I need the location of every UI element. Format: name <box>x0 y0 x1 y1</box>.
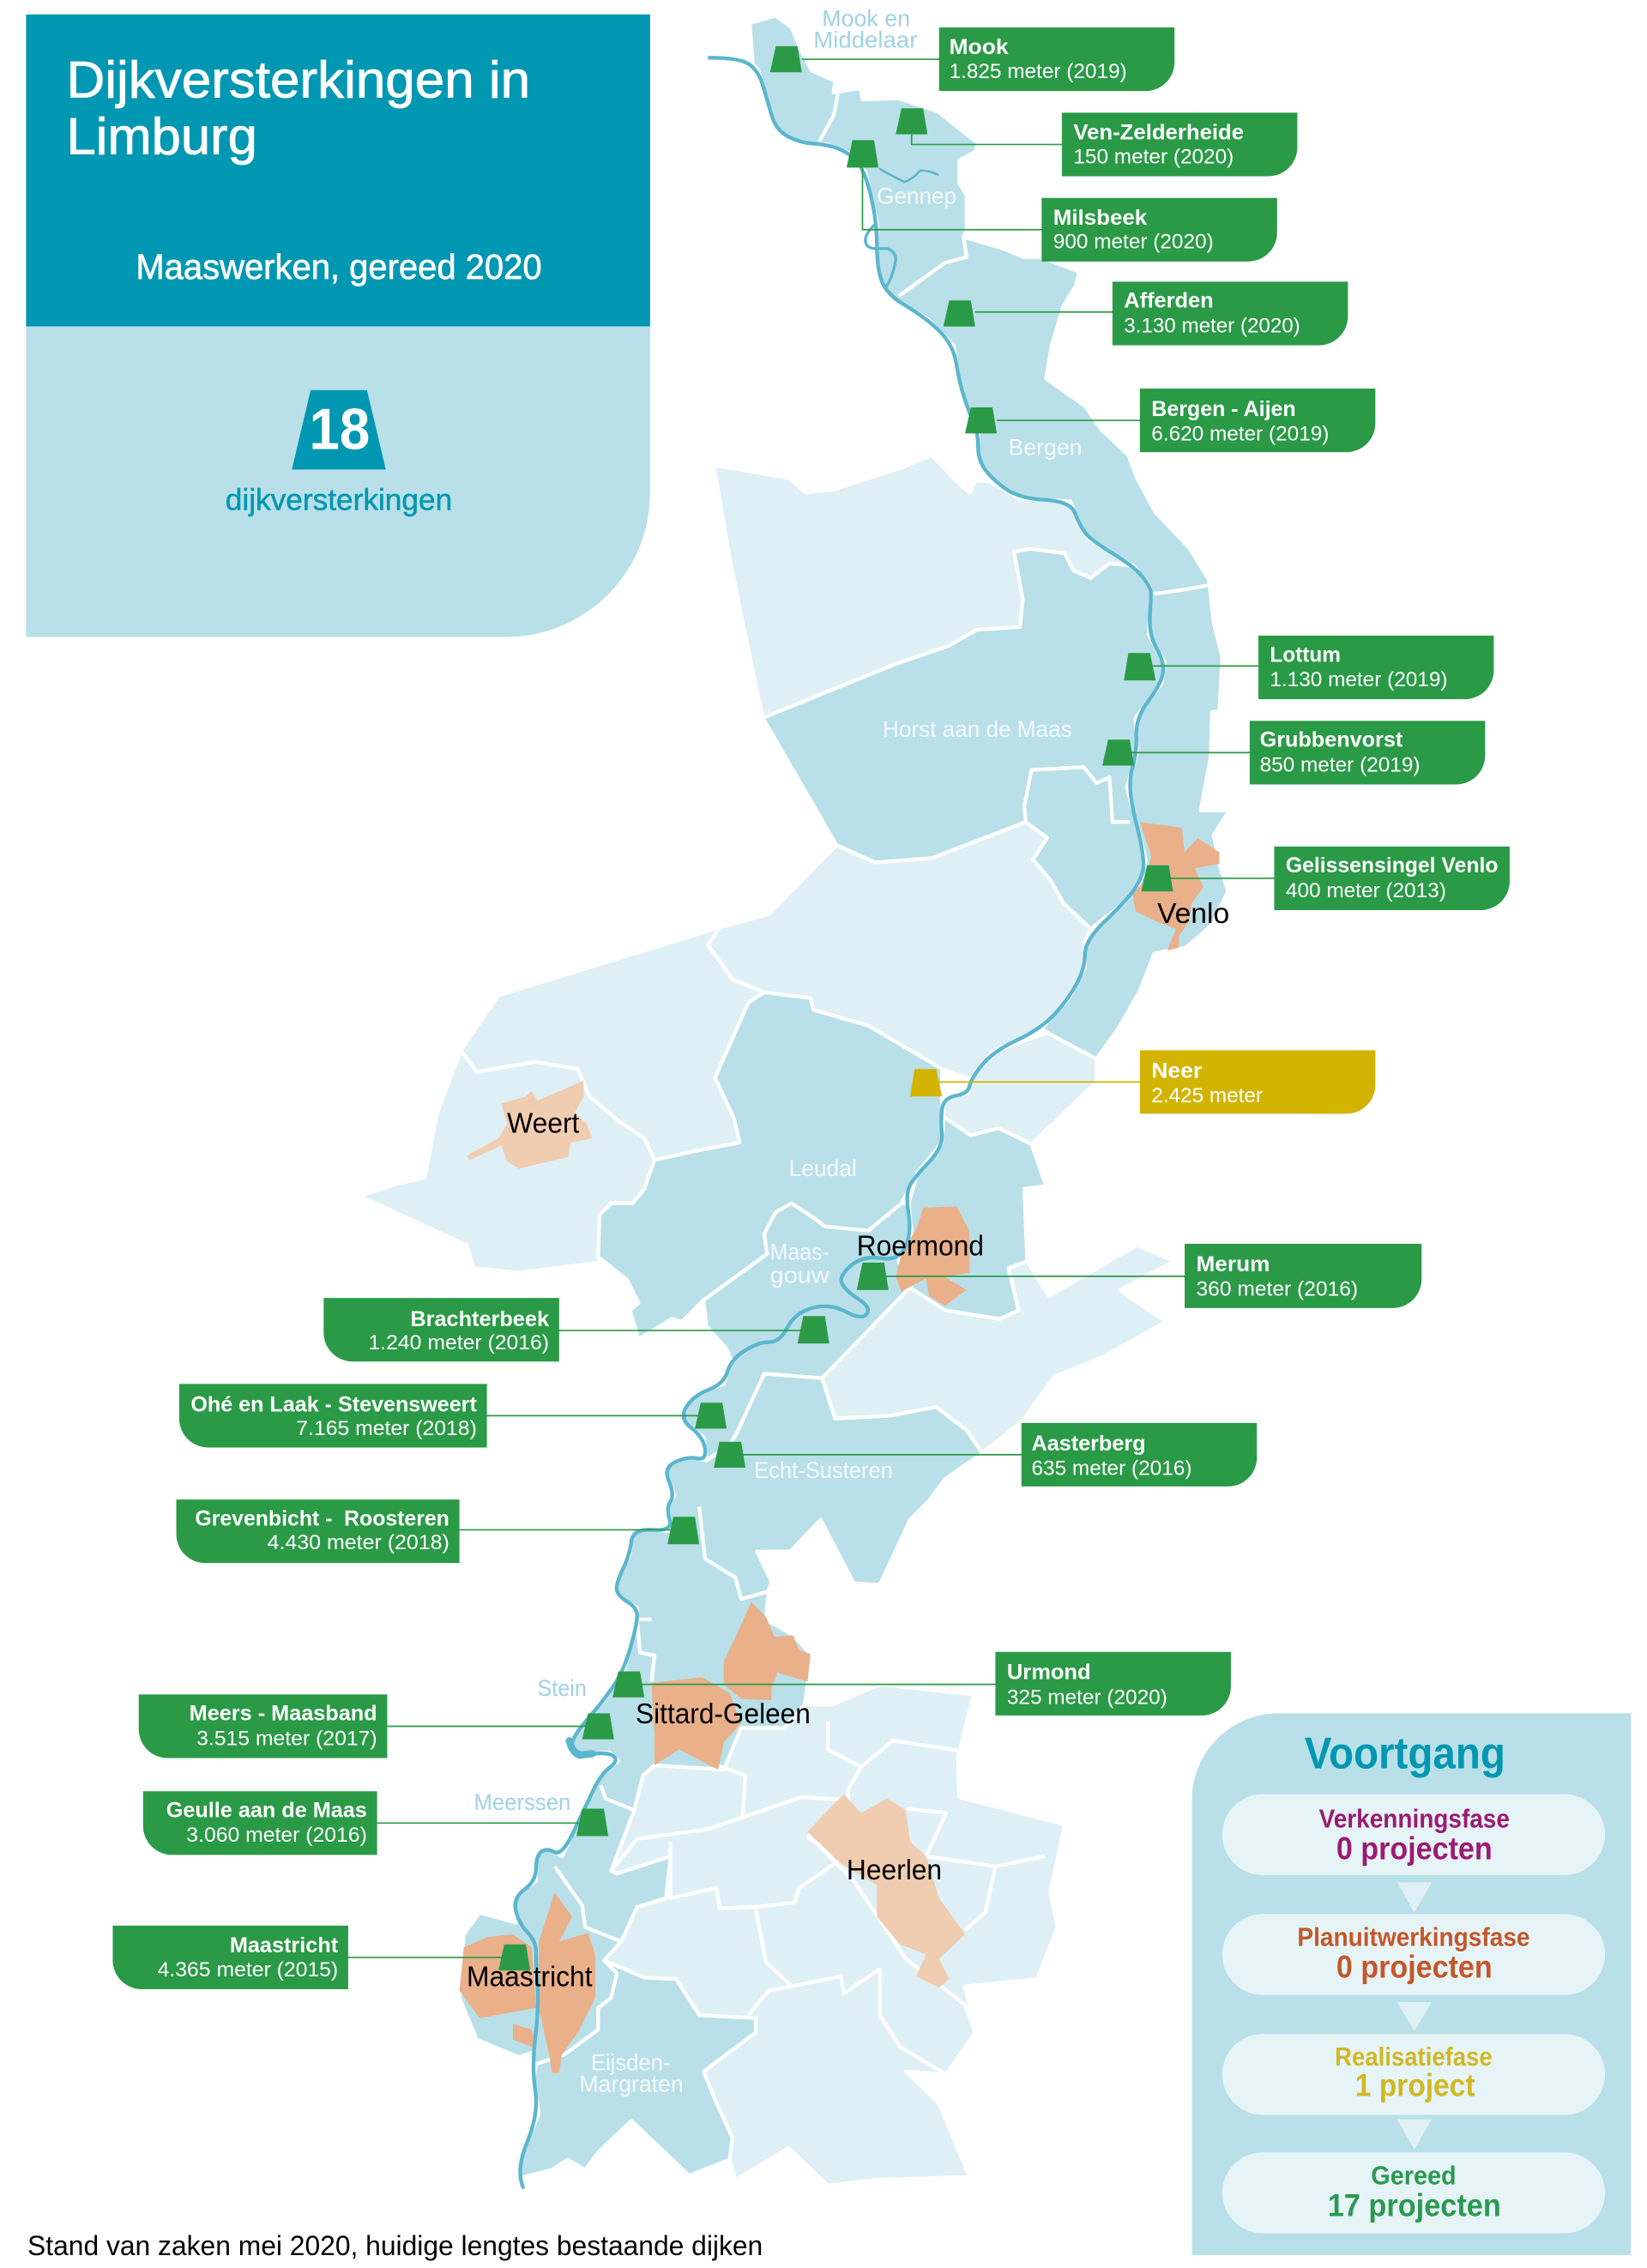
callout: Urmond <box>612 1652 1231 1716</box>
callout: Milsbeek <box>847 140 1277 262</box>
callout: Ohé en Laak - Stevensweert: 7.165 meter (2018) <box>296 1417 477 1440</box>
municipality names: Bergen <box>1009 434 1082 460</box>
callout: Aasterberg <box>714 1423 1257 1487</box>
arrow 3 <box>1397 2120 1432 2150</box>
callout: Maastricht: 4.365 meter (2015) <box>158 1958 338 1981</box>
callout: Brachterbeek: Brachterbeek <box>410 1307 550 1331</box>
municipality names: Gennep <box>877 183 956 208</box>
step: Verkenningsfase: 0 projecten <box>1336 1830 1493 1866</box>
municipality names: Eijsden- <box>591 2049 670 2075</box>
callout: Grevenbicht - Roosteren: 4.430 meter (2018) <box>268 1531 449 1554</box>
step: Planuitwerkingsfase: Planuitwerkingsfase <box>1297 1923 1530 1951</box>
callout: Grevenbicht - Roosteren <box>177 1499 699 1563</box>
callout: Bergen - Aijen <box>965 389 1375 452</box>
callout: Meers - Maasband: 3.515 meter (2017) <box>196 1727 377 1750</box>
callout: Aasterberg: Aasterberg <box>1032 1432 1146 1456</box>
callout: Neer: Neer <box>1151 1059 1202 1083</box>
municipality names: gouw <box>770 1262 830 1288</box>
municipal border lines <box>461 93 1210 2082</box>
step: Gereed <box>1222 2152 1605 2234</box>
callout: Ven-Zelderheide <box>896 108 1297 176</box>
callout: Merum <box>857 1244 1421 1308</box>
callout: Afferden: Afferden <box>1124 289 1214 313</box>
callout: Geulle aan de Maas: 3.060 meter (2016) <box>186 1824 367 1847</box>
callout: Mook: Mook <box>950 35 1010 59</box>
subtitle: Maaswerken, gereed 2020 <box>136 247 542 287</box>
step: Realisatiefase: Realisatiefase <box>1335 2043 1493 2072</box>
city names: Sittard-Geleen <box>636 1698 811 1730</box>
step: Planuitwerkingsfase: 0 projecten <box>1336 1949 1493 1985</box>
municipality names: Mook en <box>822 5 910 31</box>
footnote: Stand van zaken mei 2020, huidige lengtes bestaande dijken <box>27 2230 763 2261</box>
callout: Lottum <box>1124 636 1493 699</box>
city names: Heerlen <box>847 1855 942 1886</box>
urban area: Maastricht <box>460 1892 595 2073</box>
callout: Ohé en Laak - Stevensweert <box>179 1384 727 1447</box>
callout: Meers - Maasband <box>139 1694 614 1758</box>
step: Realisatiefase <box>1222 2034 1605 2114</box>
callout: Merum: 360 meter (2016) <box>1196 1278 1358 1301</box>
municipalities: outer light regions <box>359 455 1174 2186</box>
callout: Milsbeek: 900 meter (2020) <box>1053 231 1214 254</box>
heading: Voortgang: Voortgang <box>1305 1728 1505 1778</box>
municipality names: Maas- <box>770 1240 830 1265</box>
callout: Geulle aan de Maas <box>143 1791 608 1855</box>
city names <box>467 898 1229 1994</box>
callout: Brachterbeek <box>323 1298 830 1361</box>
panel: Voortgang <box>1192 1713 1631 2255</box>
step: Realisatiefase: 1 project <box>1355 2067 1475 2103</box>
title second line: Limburg <box>67 106 257 165</box>
icon: dike with count: 18 <box>309 398 370 462</box>
arrow 1 <box>1397 1882 1432 1913</box>
callout: Afferden: 3.130 meter (2020) <box>1124 314 1300 337</box>
municipalities: along the Maas <box>460 16 1229 2179</box>
urban area: Heerlen <box>807 1794 965 1988</box>
callout: Grubbenvorst: 850 meter (2019) <box>1260 753 1421 776</box>
map of Limburg <box>359 5 1229 2187</box>
callout: Urmond: 325 meter (2020) <box>1007 1686 1167 1709</box>
municipality names <box>474 5 1082 2097</box>
callout: Grubbenvorst: Grubbenvorst <box>1260 728 1403 752</box>
callout: Neer <box>910 1050 1375 1113</box>
callout: Grubbenvorst <box>1102 721 1485 784</box>
callout: Mook <box>770 27 1174 91</box>
arrow 2 <box>1397 2002 1432 2031</box>
callout: Bergen - Aijen: 6.620 meter (2019) <box>1151 423 1329 446</box>
municipality names: Echt-Susteren <box>754 1457 893 1483</box>
city names: Roermond <box>857 1230 984 1262</box>
callout: Ohé en Laak - Stevensweert: Ohé en Laak - Stevensweert <box>190 1392 477 1416</box>
city names: Venlo <box>1157 898 1229 930</box>
callout: Maastricht: Maastricht <box>230 1933 339 1957</box>
callout: Bergen - Aijen: Bergen - Aijen <box>1151 397 1296 421</box>
municipality names: Margraten <box>579 2072 684 2097</box>
step: Verkenningsfase: Verkenningsfase <box>1319 1805 1510 1833</box>
river Maas <box>516 57 1163 2187</box>
callout: Milsbeek: Milsbeek <box>1053 206 1148 230</box>
urban area: Sittard-Geleen <box>652 1602 811 1770</box>
callout: Mook: 1.825 meter (2019) <box>950 60 1127 83</box>
callout: Afferden <box>944 281 1348 345</box>
callout: Aasterberg: 635 meter (2016) <box>1032 1457 1192 1480</box>
step: Planuitwerkingsfase <box>1222 1914 1605 1995</box>
municipality names: Meerssen <box>474 1789 570 1815</box>
icon: dike with count <box>292 390 386 469</box>
title: Dijkversterkingen in <box>67 51 530 109</box>
callout: Gelissensingel Venlo: Gelissensingel Venlo <box>1286 854 1498 878</box>
callout: Gelissensingel Venlo <box>1141 847 1510 910</box>
step: Verkenningsfase <box>1222 1794 1605 1875</box>
city names: Maastricht <box>467 1962 593 1994</box>
callout: Ven-Zelderheide: Ven-Zelderheide <box>1073 121 1244 145</box>
callout: Meers - Maasband: Meers - Maasband <box>190 1702 377 1726</box>
title panel <box>26 15 650 327</box>
step: Gereed: 17 projecten <box>1328 2187 1501 2223</box>
callout: Brachterbeek: 1.240 meter (2016) <box>369 1331 549 1354</box>
count label: dijkversterkingen <box>226 483 452 516</box>
municipality names: Middelaar <box>813 27 917 53</box>
callout: Ven-Zelderheide: 150 meter (2020) <box>1073 145 1234 168</box>
callout: Grevenbicht - Roosteren: Grevenbicht - Roosteren <box>195 1506 449 1530</box>
municipality names: Leudal <box>789 1155 857 1181</box>
callout: Merum: Merum <box>1196 1252 1270 1276</box>
callout: Lottum: 1.130 meter (2019) <box>1270 668 1448 691</box>
step: Gereed: Gereed <box>1371 2162 1457 2190</box>
callout: Geulle aan de Maas: Geulle aan de Maas <box>166 1799 367 1823</box>
municipality names: Horst aan de Maas <box>883 716 1072 742</box>
urban area: Weert <box>467 1081 593 1168</box>
callout: Lottum: Lottum <box>1270 642 1341 667</box>
count panel <box>26 327 650 637</box>
urban area: Venlo <box>1132 822 1219 950</box>
callout: Urmond: Urmond <box>1007 1661 1091 1685</box>
urban area: Roermond <box>896 1206 969 1306</box>
callout: Gelissensingel Venlo: 400 meter (2013) <box>1286 879 1446 902</box>
municipality names: Stein <box>538 1675 587 1701</box>
callout: Maastricht <box>112 1926 530 1989</box>
callout: Neer: 2.425 meter <box>1151 1084 1263 1107</box>
city names: Weert <box>507 1107 580 1139</box>
